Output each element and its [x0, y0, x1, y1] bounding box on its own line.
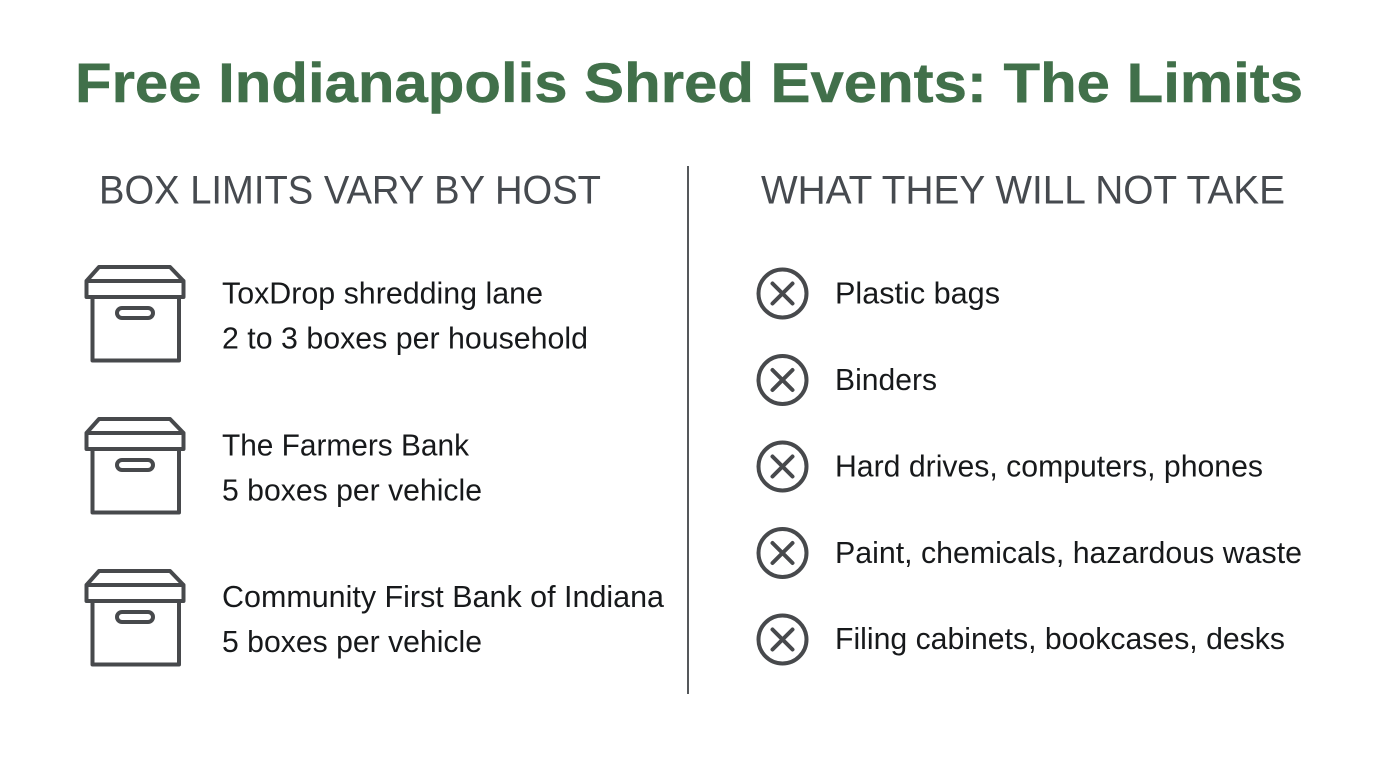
title: Free Indianapolis Shred Events: The Limits	[75, 51, 1303, 114]
text: Community First Bank	[222, 579, 665, 659]
text: The Farmers Bank: The Farmers Bank	[222, 428, 469, 462]
heading: what they will not take: WHAT THEY WILL NOT TAKE	[761, 168, 1285, 212]
text: ToxDrop	[222, 276, 588, 356]
text: paint: Paint, chemicals, hazardous waste	[835, 535, 1302, 570]
text: The Farmers Bank	[222, 428, 482, 508]
heading: box limits: BOX LIMITS VARY BY HOST	[99, 168, 601, 212]
icon: x circle 3	[758, 442, 806, 490]
text: ToxDrop: 2 to 3 boxes per household	[222, 320, 588, 356]
icon: x circle 4	[758, 529, 806, 577]
icon: x circle 1	[758, 270, 806, 318]
panel: what they will not take	[758, 270, 1302, 664]
text: plastic bags: Plastic bags	[835, 276, 1000, 310]
icon: box 3	[86, 571, 184, 664]
icon: x circle 2	[758, 356, 806, 404]
icon: box 1	[86, 267, 184, 360]
text: Community First Bank: 5 boxes per vehicle	[222, 624, 482, 659]
text: binders: Binders	[835, 362, 937, 397]
icon: box 2	[86, 419, 184, 512]
icon: x circle 5	[758, 616, 806, 664]
panel: box limits	[86, 267, 665, 664]
text: The Farmers Bank: 5 boxes per vehicle	[222, 472, 482, 508]
text: Community First Bank: Community First Bank of Indiana	[222, 579, 665, 614]
text: ToxDrop: ToxDrop shredding lane	[222, 276, 543, 310]
text: filing cabinets: Filing cabinets, bookcases, desks	[835, 621, 1285, 656]
center divider	[687, 166, 689, 694]
text: hard drives: Hard drives, computers, phones	[835, 448, 1263, 484]
